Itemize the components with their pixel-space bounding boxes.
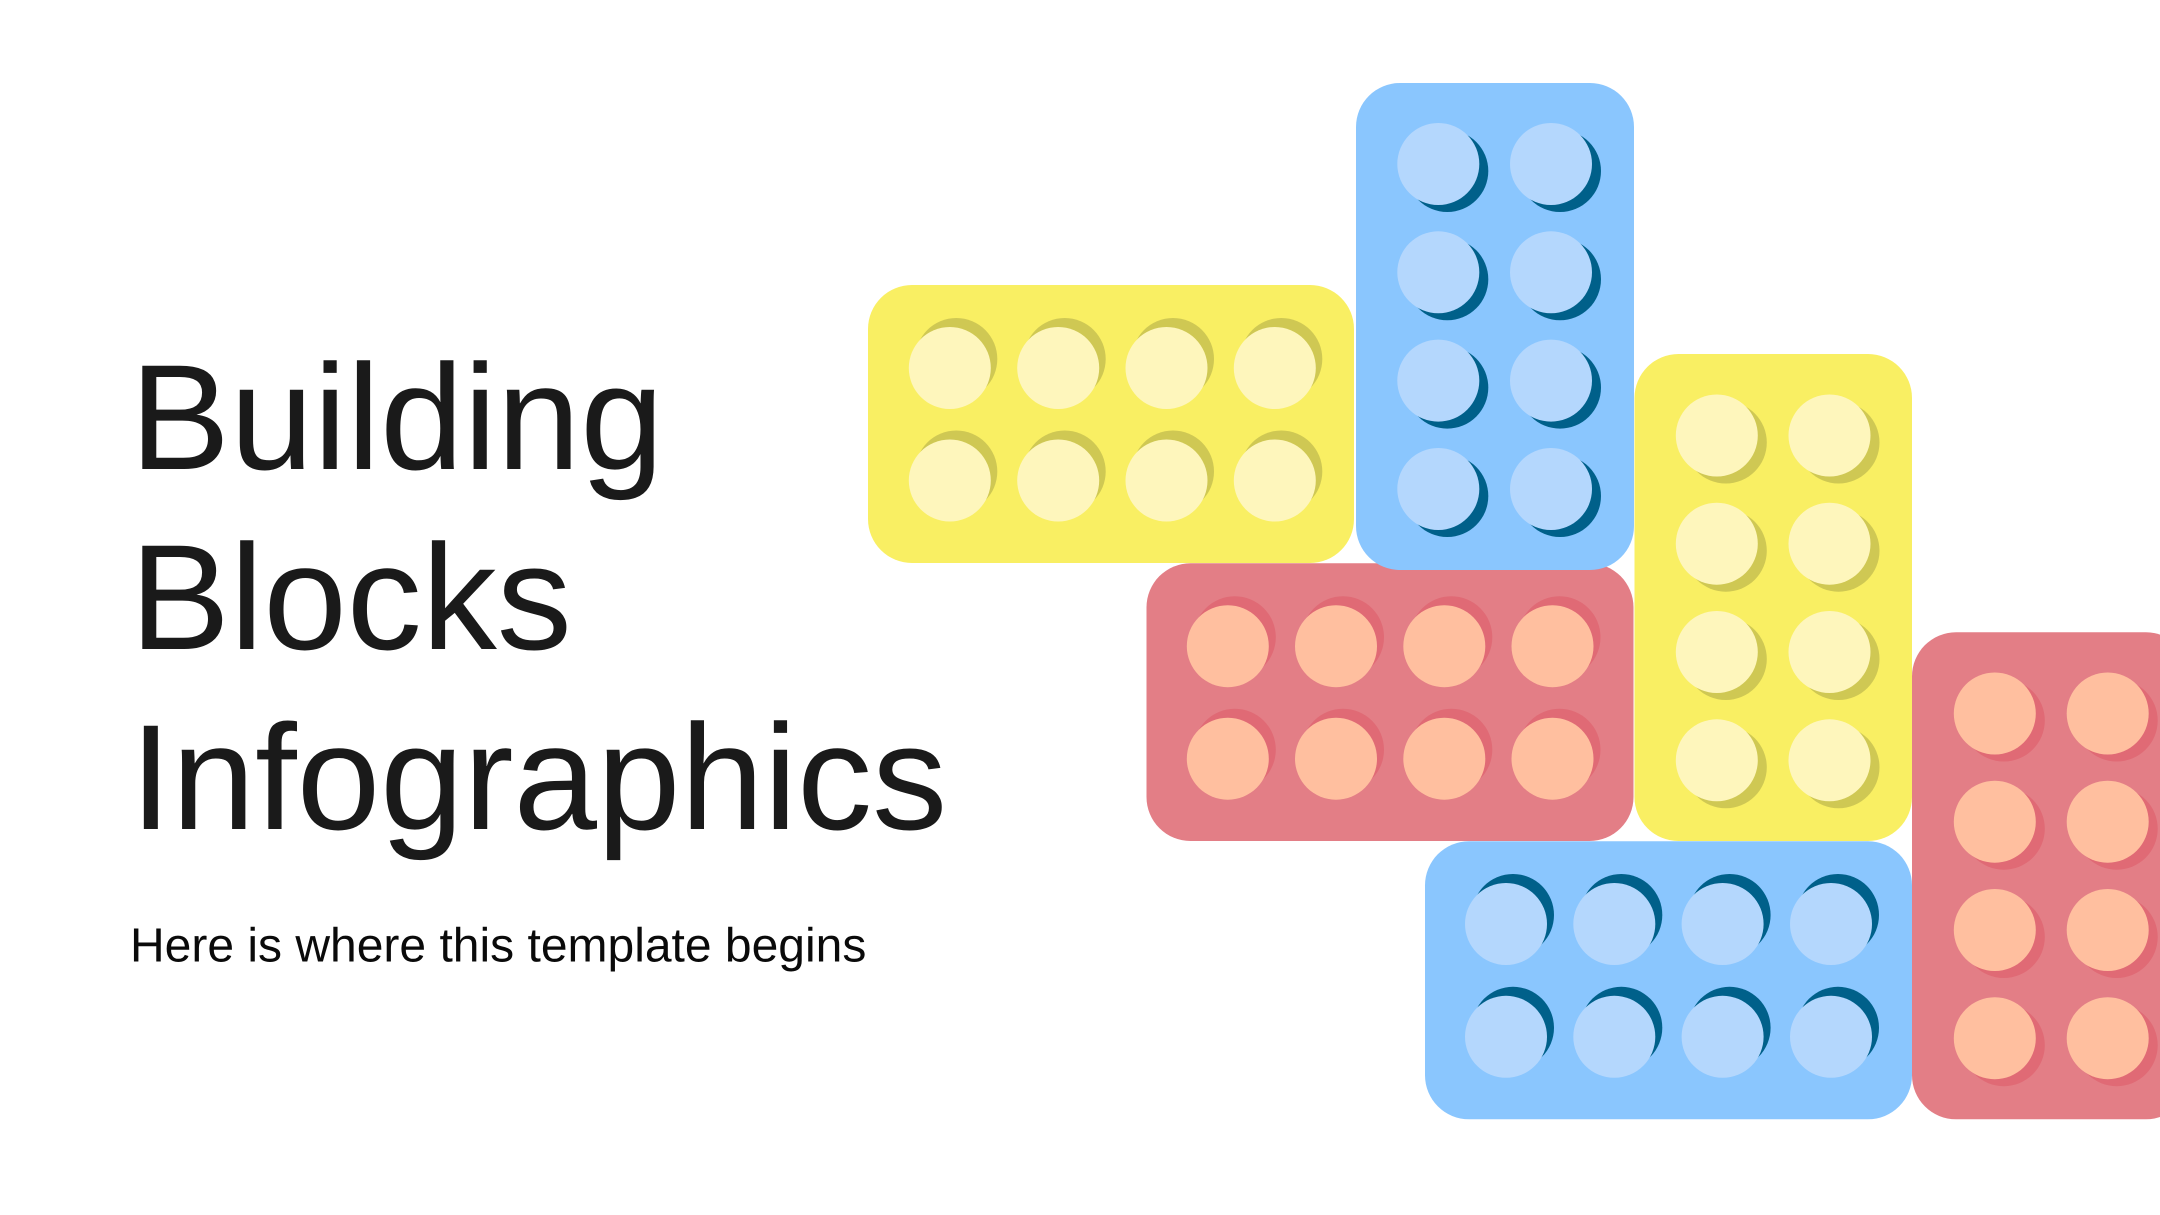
- studs: blue vertical block: [1397, 123, 1601, 537]
- panel: blue vertical block: [1356, 83, 1634, 570]
- studs: blue horizontal block: [1465, 874, 1879, 1078]
- title: Building: [130, 333, 664, 501]
- studs: yellow horizontal block: [909, 318, 1322, 522]
- panel: red horizontal block: [1146, 563, 1634, 841]
- panel: red vertical block: [1912, 632, 2160, 1119]
- studs: red vertical block: [1954, 672, 2158, 1086]
- title: Infographics: [130, 693, 947, 861]
- studs: yellow vertical block: [1676, 394, 1880, 808]
- studs: red horizontal block: [1187, 596, 1600, 800]
- panel: yellow vertical block: [1634, 354, 1912, 841]
- panel: blue horizontal block: [1425, 841, 1912, 1119]
- subtitle: Here is where this template begins: [130, 920, 866, 972]
- panel: yellow horizontal block: [868, 285, 1354, 563]
- title: Blocks: [130, 513, 572, 681]
